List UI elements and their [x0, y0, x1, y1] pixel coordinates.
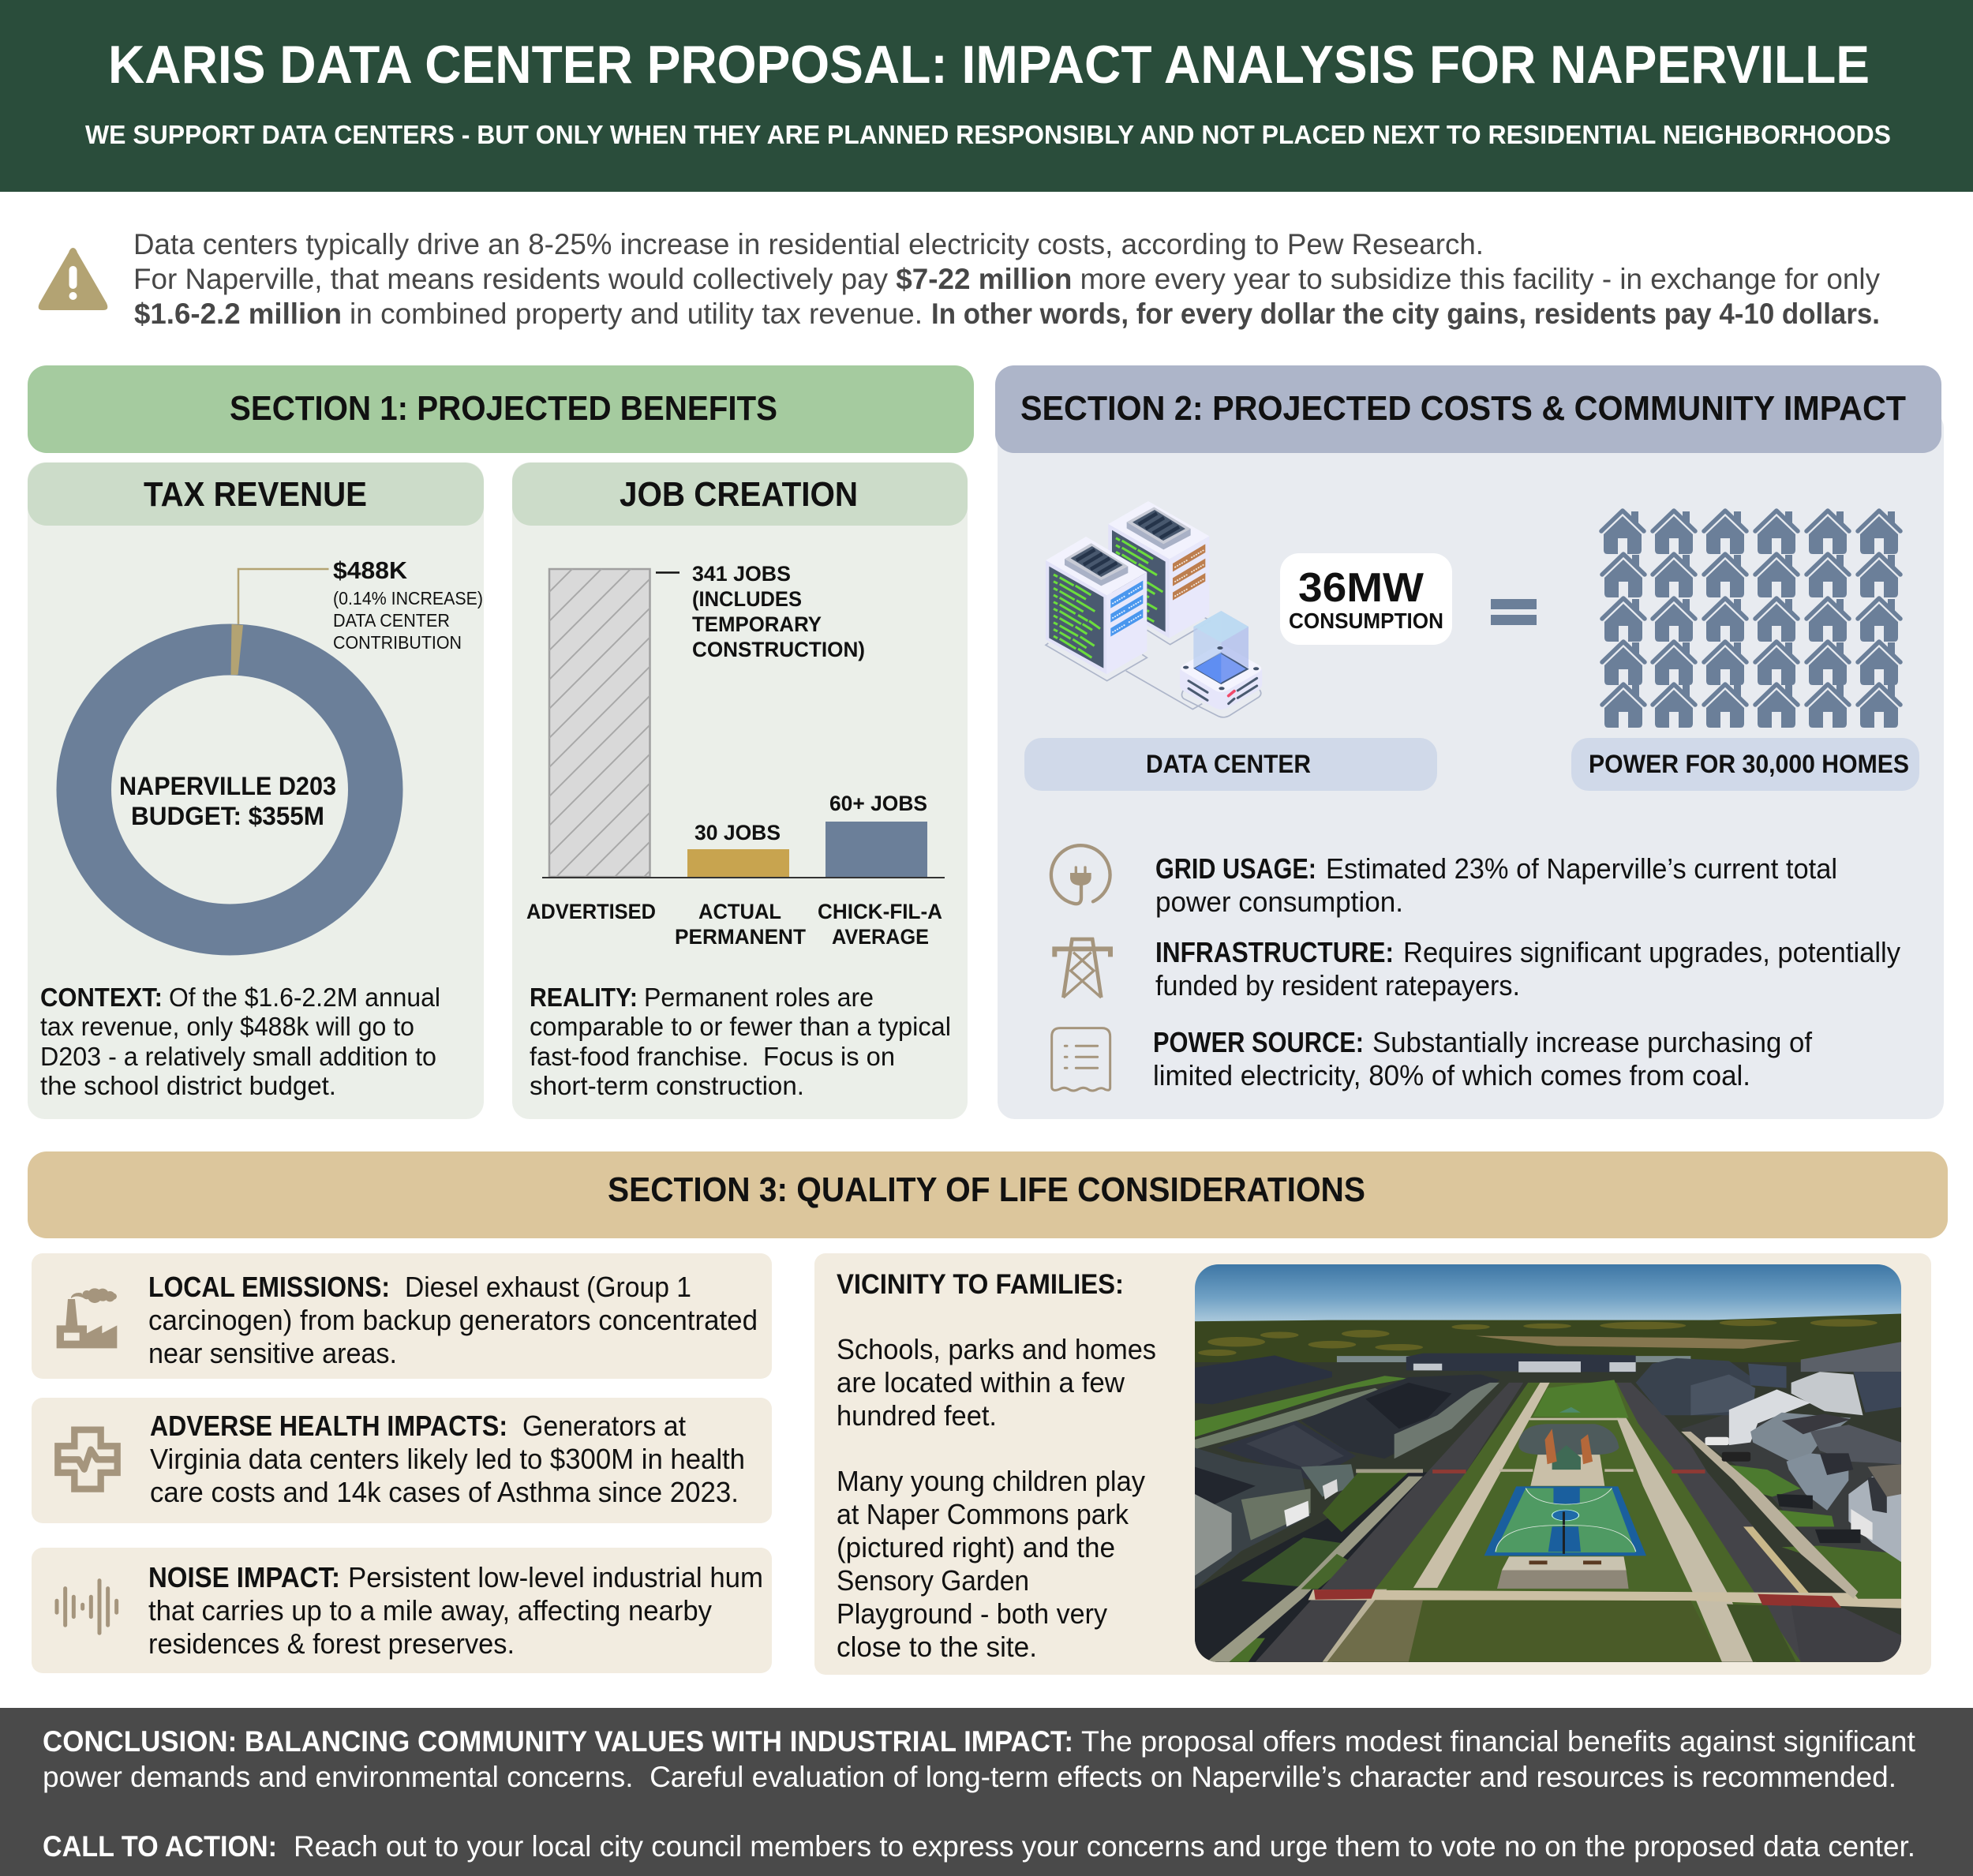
- panel: tax revenue: [28, 462, 484, 1119]
- callout: $488K contribution: [333, 556, 483, 653]
- reality text: comparable to or fewer than a typical: [530, 1012, 951, 1041]
- callout: $488K contribution: CONTRIBUTION: [333, 632, 462, 653]
- text: infrastructure: funded by resident ratepayers.: [1155, 969, 1520, 1002]
- intro text block: [133, 228, 1880, 330]
- icon: medical cross with pulse: [58, 1430, 118, 1489]
- left road: [1256, 1383, 1523, 1662]
- heading: tax revenue: TAX REVENUE: [144, 475, 367, 514]
- text: local emissions: near sensitive areas.: [148, 1337, 397, 1369]
- right road: [1616, 1383, 1901, 1662]
- right side yards and sidewalk: [1681, 1407, 1901, 1599]
- bar chart: jobs: ADVERTISED: [526, 900, 656, 923]
- icon: equals sign: [1491, 599, 1537, 625]
- context text: Of the $1.6-2.2M annual: [169, 983, 440, 1012]
- reality text: Permanent roles are: [644, 983, 874, 1012]
- reality text: [530, 983, 951, 1100]
- text: noise impact: residences & forest preserves.: [148, 1627, 515, 1660]
- call to action text: CALL TO ACTION:: [43, 1830, 277, 1863]
- context text: the school district budget.: [40, 1071, 336, 1100]
- context text: D203 - a relatively small addition to: [40, 1042, 436, 1071]
- heading: tax revenue: [28, 462, 484, 526]
- call to action text: Reach out to your local city council members to express your concerns and urge them to vote no on the proposed data center.: [294, 1830, 1915, 1863]
- icon: receipt: [1052, 1028, 1110, 1091]
- bar chart: jobs: 60+ JOBS: [829, 792, 927, 815]
- bar chart: jobs: TEMPORARY: [692, 612, 822, 636]
- subtitle: WE SUPPORT DATA CENTERS - BUT ONLY WHEN THEY ARE PLANNED RESPONSIBLY AND NOT PLACED NEXT TO RESIDENTIAL NEIGHBORHOODS: [85, 121, 1891, 150]
- section 2 header: SECTION 2: PROJECTED COSTS & COMMUNITY IMPACT: [1020, 389, 1906, 428]
- section 2 header: [995, 365, 1941, 453]
- text: local emissions: [148, 1271, 758, 1369]
- text: vicinity to families: Schools, parks and homes: [837, 1333, 1156, 1365]
- icon grid: homes: [1601, 511, 1900, 728]
- text: power source: Substantially increase purchasing of: [1372, 1026, 1813, 1058]
- text: vicinity to families: are located within a few: [837, 1366, 1125, 1399]
- intro text block: Data centers typically drive an 8-25% increase in residential electricity costs, according to Pew Research.: [133, 228, 1484, 260]
- panel: vicinity to families: [814, 1253, 1931, 1675]
- header banner: [0, 0, 1973, 192]
- callout: 36MW consumption: 36MW: [1298, 565, 1425, 611]
- left yards and sidewalk: [1195, 1473, 1427, 1662]
- callout: 36MW consumption: CONSUMPTION: [1289, 608, 1443, 633]
- illustration: data center servers: [1046, 501, 1262, 717]
- text: local emissions: Diesel exhaust (Group 1: [405, 1271, 691, 1303]
- conclusion text: [43, 1725, 1916, 1793]
- intro text block: $1.6-2.2 million: [134, 298, 342, 330]
- left row of houses along road: [1301, 1375, 1499, 1458]
- section 1 header: [28, 365, 974, 453]
- central strip: [1323, 1383, 1810, 1662]
- callout: 36MW consumption: [1280, 553, 1452, 645]
- context text: [40, 983, 440, 1100]
- text: adverse health impacts: care costs and 14k cases of Asthma since 2023.: [150, 1476, 739, 1508]
- conclusion text: CONCLUSION: BALANCING COMMUNITY VALUES WITH INDUSTRIAL IMPACT:: [43, 1725, 1073, 1758]
- text: vicinity to families: [837, 1269, 1156, 1663]
- reality text: REALITY:: [530, 983, 638, 1012]
- intro text block: In other words, for every dollar the city gains, residents pay 4-10 dollars.: [931, 298, 1880, 330]
- text: grid usage: power consumption.: [1155, 886, 1403, 918]
- text: noise impact: that carries up to a mile away, affecting nearby: [148, 1594, 712, 1627]
- bar chart: jobs: PERMANENT: [675, 925, 806, 949]
- far row of houses: [1406, 1354, 1636, 1372]
- text: grid usage: [1155, 852, 1837, 918]
- conclusion text: The proposal offers modest financial benefits against significant: [1081, 1725, 1916, 1758]
- text: infrastructure: INFRASTRUCTURE:: [1155, 936, 1394, 968]
- icon: warning triangle: [39, 248, 107, 310]
- conclusion text: power demands and environmental concerns. Careful evaluation of long-term effects on Naperville’s character and resources is recommended.: [43, 1761, 1896, 1793]
- bar chart: jobs: AVERAGE: [832, 925, 929, 949]
- label pill: data center: DATA CENTER: [1146, 750, 1311, 778]
- icon: transmission tower: [1054, 938, 1110, 998]
- text: vicinity to families: at Naper Commons park: [837, 1498, 1129, 1530]
- text: infrastructure: [1155, 936, 1900, 1002]
- donut chart: D203 budget: BUDGET: $355M: [131, 802, 324, 830]
- photo: aerial view of Naper Commons park: [1184, 1255, 1931, 1664]
- panel: section 2 costs and community impact: [995, 365, 1944, 1119]
- label pill: power for homes: POWER FOR 30,000 HOMES: [1589, 750, 1909, 778]
- text: local emissions: carcinogen) from backup generators concentrated: [148, 1304, 758, 1336]
- text: power source: limited electricity, 80% of which comes from coal.: [1153, 1059, 1750, 1092]
- text: adverse health impacts: [150, 1410, 745, 1508]
- text: vicinity to families: Many young children play: [837, 1465, 1145, 1497]
- donut chart: D203 budget: NAPERVILLE D203: [119, 772, 336, 800]
- text: vicinity to families: Playground - both very: [837, 1597, 1107, 1630]
- reality text: fast-food franchise. Focus is on: [530, 1042, 895, 1071]
- far-left houses and bank: [1195, 1355, 1332, 1404]
- panel: job creation: [512, 462, 968, 1119]
- text: noise impact: [148, 1561, 763, 1660]
- section 1 header: SECTION 1: PROJECTED BENEFITS: [230, 389, 777, 428]
- right side houses: [1636, 1358, 1755, 1415]
- context text: tax revenue, only $488k will go to: [40, 1012, 414, 1041]
- title: KARIS DATA CENTER PROPOSAL: IMPACT ANALYSIS FOR NAPERVILLE: [108, 35, 1870, 95]
- text: noise impact: NOISE IMPACT:: [148, 1561, 340, 1593]
- text: grid usage: GRID USAGE:: [1155, 852, 1316, 885]
- callout: $488K contribution: $488K: [333, 556, 408, 584]
- bar chart: jobs: ACTUAL: [698, 900, 781, 923]
- reality text: short-term construction.: [530, 1071, 804, 1100]
- text: adverse health impacts: Virginia data centers likely led to $300M in health: [150, 1443, 745, 1475]
- text: infrastructure: Requires significant upgrades, potentially: [1403, 936, 1900, 968]
- bar chart: jobs: CHICK-FIL-A: [818, 900, 942, 923]
- bar chart: jobs: 30 JOBS: [694, 821, 781, 844]
- walks: [1413, 1383, 1550, 1588]
- label pill: power for homes: [1571, 738, 1919, 791]
- text: grid usage: Estimated 23% of Naperville’s current total: [1326, 852, 1837, 885]
- card: adverse health impacts: [32, 1398, 772, 1523]
- callout: $488K contribution: DATA CENTER: [333, 610, 450, 631]
- text: vicinity to families: hundred feet.: [837, 1399, 997, 1432]
- text: vicinity to families: VICINITY TO FAMILIES:: [837, 1269, 1124, 1300]
- bar chart: jobs: [526, 562, 945, 949]
- heading: job creation: JOB CREATION: [620, 475, 858, 514]
- text: vicinity to families: (pictured right) and the: [837, 1531, 1115, 1563]
- icon: factory: [57, 1288, 117, 1348]
- context text: CONTEXT:: [40, 983, 163, 1012]
- intro text block: in combined property and utility tax revenue.: [350, 298, 923, 330]
- bar chart: jobs: 341 JOBS: [692, 562, 791, 586]
- text: local emissions: LOCAL EMISSIONS:: [148, 1271, 390, 1303]
- text: noise impact: Persistent low-level industrial hum: [348, 1561, 763, 1593]
- section 3 header: [28, 1151, 1948, 1238]
- text: vicinity to families: close to the site.: [837, 1631, 1037, 1663]
- label pill: data center: [1024, 738, 1437, 791]
- cross walk and bottom lawn: [1308, 1590, 1901, 1608]
- section 3 header: SECTION 3: QUALITY OF LIFE CONSIDERATIONS: [608, 1170, 1365, 1209]
- court: [1484, 1486, 1646, 1556]
- card: local emissions: [32, 1253, 772, 1379]
- icon: plug: [1051, 845, 1110, 904]
- intro text block: For Naperville, that means residents would collectively pay $7-22 million more every year to subsidize this facility - in exchange for only: [133, 263, 1880, 295]
- text: adverse health impacts: ADVERSE HEALTH IMPACTS:: [150, 1410, 507, 1442]
- text: adverse health impacts: Generators at: [522, 1410, 686, 1442]
- donut chart: D203 budget: [57, 569, 402, 955]
- hill and playground: [1533, 1380, 1629, 1418]
- callout: $488K contribution: (0.14% INCREASE): [333, 588, 483, 608]
- conclusion band: [0, 1708, 1973, 1876]
- heading: job creation: [512, 462, 968, 526]
- card: noise impact: [32, 1548, 772, 1673]
- bar chart: jobs: (INCLUDES: [692, 587, 802, 611]
- icon: sound wave: [57, 1581, 117, 1633]
- text: vicinity to families: Sensory Garden: [837, 1564, 1029, 1597]
- text: power source: [1153, 1026, 1813, 1092]
- text: power source: POWER SOURCE:: [1153, 1026, 1364, 1058]
- bar chart: jobs: CONSTRUCTION): [692, 638, 865, 661]
